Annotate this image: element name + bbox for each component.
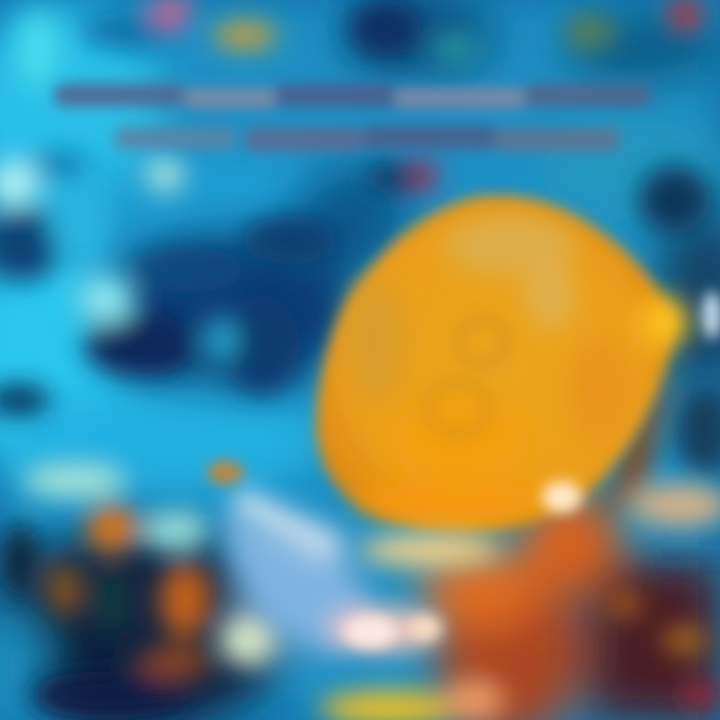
rocket and bright highlights [207,291,720,720]
bottom left: orange and teal blocks [0,462,360,720]
icon: bitcoin coin [316,195,689,532]
bottom right: glowing orange flare [420,350,720,720]
title: blurred headline bars [55,84,650,150]
bitcoin symbol [424,330,492,438]
dark and light background blocks [0,0,720,475]
